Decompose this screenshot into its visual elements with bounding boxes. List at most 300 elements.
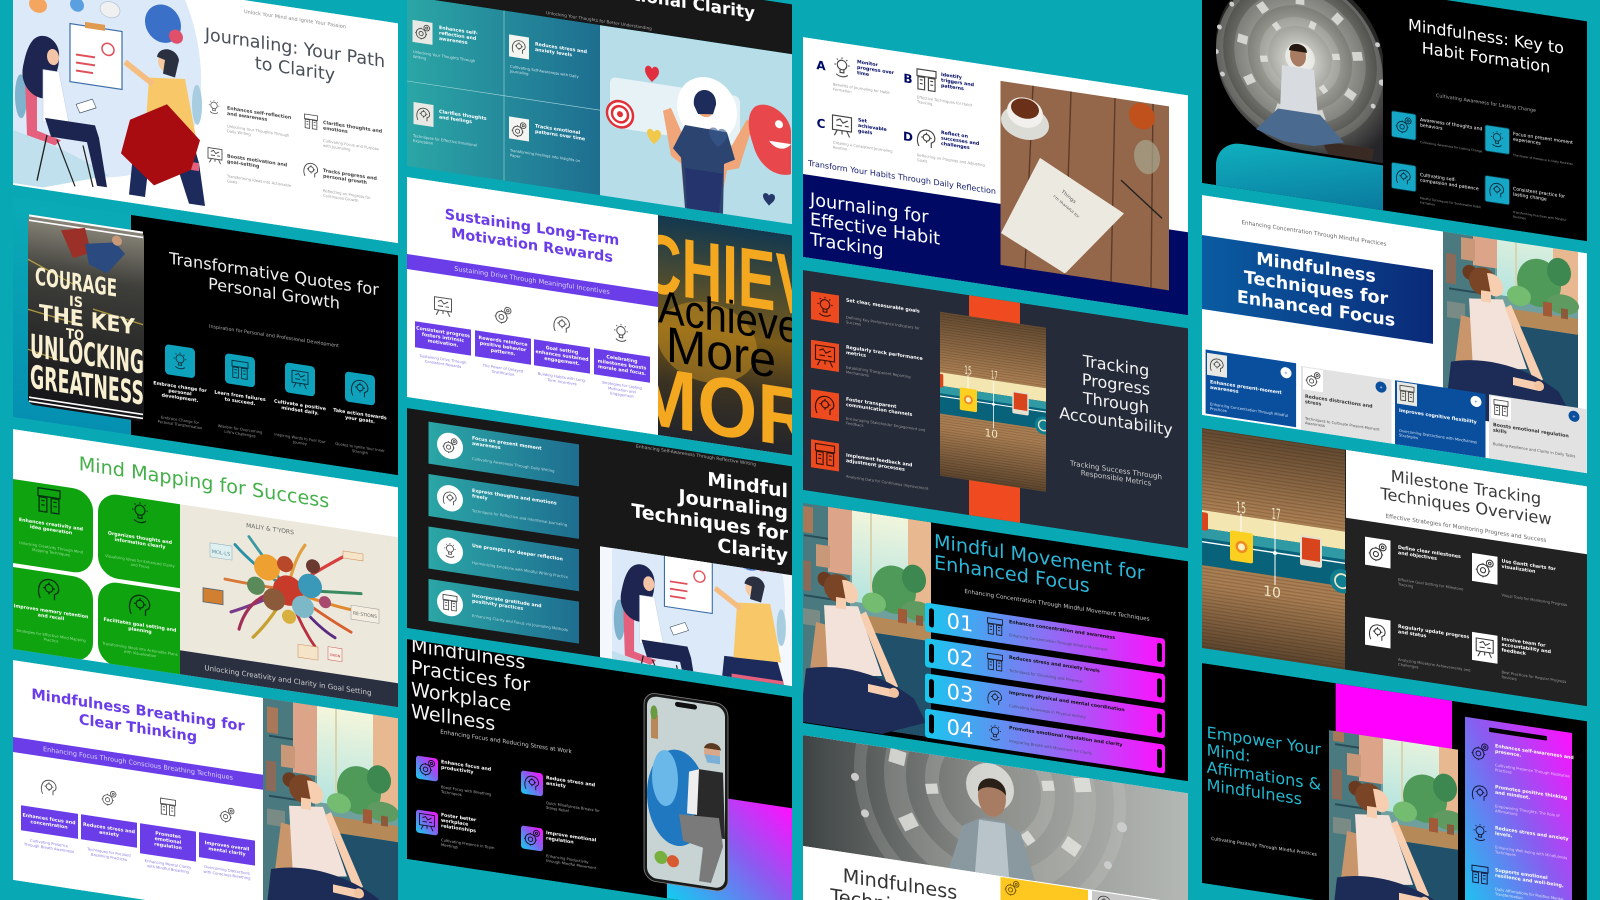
title: Enhanced Focus — [934, 551, 1090, 597]
red hexagon — [121, 104, 200, 186]
card 1: Enhances focus and — [23, 813, 75, 826]
panel: Empower Your Mind — [1202, 663, 1587, 900]
card 3: Goal setting — [546, 346, 578, 356]
item 3 — [1365, 617, 1471, 677]
item 3: compassion and patience — [1420, 177, 1479, 192]
item B: Identify — [941, 73, 962, 81]
gradient block — [667, 789, 792, 900]
book cover: courage quote: GREATNESS — [30, 358, 144, 413]
item: focus: Techniques — [440, 790, 462, 797]
bar 2: Techniques for Reflective and Intentional Journaling — [471, 509, 568, 527]
image: Achieve More poster: Achieve — [658, 280, 800, 353]
card: memory: Improves memory retention — [14, 604, 88, 620]
item: relationships: workplace — [441, 818, 468, 828]
timeline image: 10 — [1263, 583, 1281, 602]
card 2 — [1301, 366, 1392, 444]
cell 3: Clarifies thoughts — [439, 110, 487, 122]
item 4: Best Practices for Regular Progress — [1502, 670, 1566, 684]
item 1: presence. — [1495, 749, 1521, 759]
panel: Mindfulness Breathing for Clear Thinking — [13, 660, 399, 900]
card 1: Enhances present-moment — [1210, 380, 1282, 396]
item A — [816, 53, 895, 101]
quote item 4: your goals. — [345, 415, 375, 425]
step 01: Enhancing Concentration Through Mindful Movement — [1009, 633, 1108, 652]
item D: Reflecting on Progress and Adjusting — [917, 153, 985, 167]
subtitle: Sustaining Drive Through Meaningful Incentives — [454, 265, 610, 296]
card 3: Building Habits with Long- — [538, 372, 586, 383]
item C: achievable — [858, 123, 887, 133]
item 3: Formation — [1420, 200, 1435, 207]
timeline image: 17 — [1271, 505, 1280, 524]
title: Tracking — [1083, 351, 1149, 380]
panel: Sustaining Long-Term Motivation Rewards — [407, 177, 813, 467]
card 4 — [199, 803, 255, 881]
card: memory: and recall — [38, 612, 65, 622]
quote item 2: Life's Challenges — [224, 430, 256, 438]
mind map image: MALIY & T'YORS — [246, 522, 294, 536]
step 03: Improves physical and mental coordination — [1009, 690, 1125, 713]
title: to Clarity — [255, 54, 335, 86]
item 2: Empowering Thoughts: The Role of — [1495, 804, 1560, 818]
card: goal setting: with Visualization — [124, 650, 157, 659]
card 3: Improves cognitive flexibility — [1399, 408, 1478, 426]
card 2: anxiety — [99, 830, 120, 839]
title: Clarity — [717, 534, 789, 567]
card 4: Overcoming Distractions — [204, 865, 250, 876]
title: Practices for — [411, 656, 530, 697]
bar 4: Enhancing Clarity and Focus via Journaling Methods — [472, 614, 568, 632]
subtitle: Enhancing Concentration Through Mindful Practices — [1241, 220, 1387, 248]
quote item 3: Inspiring Words to Fuel Your — [274, 433, 326, 444]
bar 4: Incorporate gratitude and — [472, 594, 542, 609]
title: Techniques for — [631, 499, 789, 546]
title: Techniques for — [1244, 268, 1388, 310]
card 1: Sustaining Drive Through — [420, 354, 466, 365]
item B: Effective Techniques for Habit — [917, 95, 972, 108]
item D: D — [903, 129, 913, 145]
item 3 — [1392, 162, 1482, 214]
subtitle: Enhancing Concentration Through Mindful Movement Techniques — [964, 589, 1150, 623]
title: Journaling: Your Path — [205, 25, 385, 72]
cell 4: Paper — [510, 153, 521, 159]
item 3: Feedback — [846, 421, 864, 428]
card 2: The Power of Delayed — [483, 363, 523, 374]
bar 2: Express thoughts and emotions — [472, 489, 557, 507]
item 2: Promotes positive thinking — [1495, 785, 1567, 801]
step 02: 02 — [947, 643, 973, 672]
quote item 4: Strength — [352, 449, 369, 456]
card: organizes: Organizes thoughts and — [108, 531, 172, 546]
card 1: Enhancing Concentration Through Mindful — [1210, 402, 1288, 418]
illustration: consultation — [13, 0, 205, 212]
cell 3 — [412, 102, 487, 154]
title: Tracking — [809, 229, 884, 261]
subtitle: Unlocking Your Thoughts for Better Understanding — [546, 10, 652, 31]
item D: Reflect on — [941, 131, 968, 140]
subtitle: Enhancing Focus Through Conscious Breathing Techniques — [43, 745, 234, 782]
card 3: Enhancing Mental Clarity — [145, 859, 191, 870]
item 3: Regularly update progress — [1398, 625, 1469, 640]
item: progress: Continuous Growth — [323, 194, 359, 203]
item 3: communication channels — [846, 402, 912, 418]
item 1: Tracking — [1397, 582, 1414, 589]
photo: notebook on wood: Things — [1059, 188, 1077, 205]
quote item 2: Learn from failures — [214, 390, 266, 403]
card: creativity: idea generation — [30, 524, 73, 537]
item: clarifies thoughts: Clarifies thoughts and — [323, 121, 382, 135]
illustration: consultation — [600, 497, 792, 727]
item: relationships: Foster better — [441, 813, 476, 823]
bar 4 — [428, 579, 579, 644]
title: Enhanced Focus — [1237, 287, 1395, 331]
subtitle: Tracking Success Through — [1070, 458, 1162, 481]
item 1: Enhances self-awareness and — [1495, 744, 1574, 761]
subtitle: Enhancing Focus and Reducing Stress at Work — [440, 730, 572, 756]
quote item 1: Embrace Change for — [161, 415, 199, 425]
card 4: mental clarity — [208, 846, 246, 858]
card 1: fosters intrinsic — [422, 332, 464, 344]
card: goal setting: Facilitates goal setting and — [104, 618, 176, 634]
timeline image: 15 — [1236, 498, 1246, 518]
yellow card — [1000, 877, 1088, 900]
item 4: Reviews — [1501, 675, 1517, 681]
quote item 1: Embrace change for — [153, 381, 207, 394]
step 04: 04 — [947, 714, 973, 743]
card 1: Through Breath Awareness — [23, 842, 74, 854]
card 1: Consistent Rewards — [425, 360, 461, 369]
notch — [1489, 727, 1547, 741]
subtitle band — [407, 254, 658, 307]
quote item 2: Wisdom for Overcoming — [218, 424, 262, 435]
book cover: courage quote — [28, 214, 144, 422]
book cover: courage quote: TO — [66, 326, 84, 345]
quote item 3: Journey — [292, 440, 308, 446]
image: Achieve More poster: CHIEV — [641, 215, 813, 334]
photo: notebook on wood — [1000, 81, 1169, 290]
item: focus: Enhance focus and — [441, 760, 491, 773]
cell 3: and feelings — [439, 114, 472, 125]
item: progress: personal growth — [323, 173, 367, 186]
image: girl meditating — [1443, 232, 1579, 422]
panel: Mindful Movement for Enhanced Focus — [798, 497, 1188, 781]
bar 2 — [428, 474, 579, 539]
card 4: + — [1572, 414, 1576, 419]
card: goal setting — [98, 580, 180, 676]
title: Through — [1082, 388, 1149, 417]
orange stripe — [969, 295, 1020, 523]
photo: meditating man in mandala — [1214, 0, 1385, 164]
gradient panel — [1465, 717, 1572, 900]
subtitle: Unlock Your Mind and Ignite Your Passion — [244, 9, 346, 30]
subtitle: Enhancing Self-Awareness Through Reflective Writing — [636, 444, 756, 468]
card 4 — [594, 320, 650, 401]
step 01: Enhances concentration and awareness — [1009, 619, 1115, 641]
item: self-reflection: Daily Writing — [227, 129, 251, 137]
item 2 — [1472, 553, 1567, 607]
panel: Transformative Quotes for Personal Growth — [13, 197, 398, 475]
item: self-reflection — [208, 100, 291, 138]
item: stress: Quick Mindfulness Breaks for — [546, 801, 600, 813]
item 2: Affirmations — [1495, 809, 1517, 817]
illustration: man facing board with hearts — [600, 25, 792, 224]
title: Habit Formation — [1422, 38, 1550, 77]
item 2: Focus on present moment — [1513, 132, 1573, 146]
card 4: skills — [1493, 428, 1507, 436]
card 2 — [81, 787, 137, 864]
book cover: courage quote: THE KEY — [39, 300, 136, 341]
card 3: Strategies — [1399, 433, 1418, 440]
card 3: enhances sustained — [535, 349, 589, 363]
step 04: Integrating Breath with Movement for Clarity — [1009, 739, 1093, 756]
item: stress: Stress Relief — [546, 806, 570, 813]
item 4: resilience and well-being. — [1495, 873, 1564, 889]
item: progress — [304, 162, 377, 206]
card 4: milestones boosts — [598, 358, 646, 372]
item: clarifies thoughts: Cultivating Focus and Purpose — [323, 139, 379, 151]
card 1: Consistent progress — [416, 326, 470, 339]
item: relationships: relationships — [441, 823, 476, 834]
cell 1: Writing — [413, 55, 427, 61]
item C: C — [817, 116, 826, 131]
panel: Mindfulness Techniques — [803, 629, 1188, 900]
item 2 — [1472, 781, 1568, 824]
title: Motivation Rewards — [451, 226, 613, 266]
card 1 — [415, 294, 471, 370]
title: Mind: — [1207, 740, 1251, 766]
item 1: and objectives — [1398, 550, 1437, 562]
item: motivation: Boosts motivation and — [227, 154, 287, 168]
cell 1: awareness — [439, 36, 468, 46]
item 3 — [811, 389, 926, 437]
panel: Journaling: Your Path to Clarity — [13, 0, 398, 243]
panel: Mindfulness Practices for Workplace Wellness — [407, 633, 792, 900]
title: Empower Your — [1207, 723, 1321, 759]
image: girl meditating — [263, 698, 399, 900]
card: organizes: Visualizing Ideas for Enhanced Clarity — [105, 554, 175, 568]
panel: Tracking Progress Through Accountability — [803, 270, 1188, 548]
book cover: courage quote: IS — [69, 294, 83, 312]
item 4: Implement feedback and — [846, 454, 912, 469]
item 4: lasting change — [1513, 192, 1547, 203]
item 1: Awareness of thoughts and — [1420, 118, 1482, 132]
item B — [903, 66, 975, 113]
panel: Mindful Journaling Techniques for Clarity — [407, 408, 792, 727]
grey card — [1092, 891, 1188, 900]
quote item 1: personal — [168, 388, 192, 398]
subtitle band — [13, 737, 263, 790]
photo: notebook on wood: I'm thankful for — [1052, 194, 1081, 219]
title: Workplace — [411, 678, 511, 716]
book cover: courage quote: COURAGE — [35, 262, 117, 303]
title: Mindfulness — [1256, 249, 1376, 287]
item 2: Mechanisms — [846, 370, 869, 378]
bar 3 — [428, 526, 579, 591]
card 1: Practices — [1210, 407, 1227, 413]
card 4: with Conscious Breathing — [204, 870, 251, 881]
item: clarifies thoughts: with Journaling — [323, 144, 351, 152]
item C: Set — [858, 118, 867, 125]
cell 1 — [412, 20, 478, 63]
item: motivation — [208, 147, 291, 187]
quote item 4: Take action towards — [333, 408, 387, 422]
card: memory: Practice — [44, 637, 59, 644]
item: focus — [416, 755, 492, 802]
item: progress: Tracks progress and — [323, 169, 377, 182]
mind map image: ORGN — [330, 653, 341, 659]
title: Mindfulness — [1207, 775, 1302, 809]
card 3: emotional — [155, 836, 182, 846]
item: clarifies thoughts — [304, 114, 382, 152]
card 2 — [475, 302, 531, 380]
card: organizes: and Focus — [131, 563, 149, 569]
item D: successes and — [941, 135, 980, 147]
item 2: and mindset. — [1495, 790, 1530, 801]
title: Clear Thinking — [79, 711, 197, 746]
item: stress: Reduce stress and — [546, 776, 595, 788]
cell 2: Cultivating Self-Awareness with Daily — [510, 65, 579, 79]
card 3: with Mindful Breathing — [147, 864, 190, 874]
phone mockup — [644, 692, 728, 893]
item: self-reflection: and awareness — [227, 111, 267, 123]
item A: Benefits of Journaling for Habit — [833, 83, 890, 95]
item 2: The Power of Presence in Daily Routines — [1512, 153, 1573, 166]
card 1 — [1206, 350, 1296, 427]
item D — [903, 124, 985, 172]
card 3: Overcoming Distractions with Mindfulness — [1399, 429, 1477, 445]
quote item 4: Quotes to Ignite Your Inner — [335, 442, 385, 453]
card 3: Promotes — [155, 832, 181, 840]
card 4: morale and focus. — [598, 364, 646, 377]
item: relationships: Meetings — [441, 843, 458, 849]
title: Affirmations & — [1207, 758, 1322, 794]
cell 1: Unlocking Your Thoughts Through — [413, 50, 475, 63]
item 2: experiences — [1513, 137, 1541, 147]
item: regulation: regulation — [546, 836, 574, 846]
card: goal setting: planning — [128, 626, 152, 636]
card: creativity: Mapping Techniques — [32, 548, 70, 557]
item C: Creating a Consistent Journaling — [833, 141, 893, 154]
timeline image: 15 — [964, 364, 972, 378]
bar 2: freely — [472, 493, 488, 502]
quote item 1: development. — [162, 392, 199, 404]
panel: Emotional Clarity — [407, 0, 792, 224]
item: motivation: Transforming Ideas into Actionable — [227, 174, 291, 188]
item 1: Effective Goal Setting for Milestone — [1398, 578, 1463, 592]
item C: goals — [858, 128, 872, 136]
card 3 — [140, 795, 196, 875]
item A: A — [816, 58, 826, 74]
title: Personal Growth — [208, 274, 340, 313]
card: organizes — [98, 492, 180, 588]
item 1: Defining Key Performance Indicators for — [846, 316, 920, 331]
item 4: accountability and — [1501, 642, 1552, 655]
card 2: Awareness — [1305, 421, 1325, 428]
item: focus: Boost Focus with Breathing — [441, 785, 491, 797]
item 1 — [1392, 111, 1483, 153]
item 4: Routines — [1513, 215, 1526, 221]
quote item 3: mindset daily. — [281, 405, 319, 417]
title: Techniques Overview — [1379, 484, 1552, 529]
item: stress — [521, 770, 600, 818]
item: focus: productivity — [441, 765, 474, 776]
step 02 — [925, 638, 1165, 703]
panel: Mind Mapping for Success — [13, 429, 398, 709]
cell 2: Journaling — [509, 69, 529, 76]
title: Accountability — [1059, 403, 1173, 439]
item 1: Cultivating Presence Through Meditation — [1495, 763, 1570, 779]
timeline image: 17 — [991, 368, 998, 382]
bar 3: Harmonizing Emotions with Mindful Writing Practice — [472, 561, 569, 579]
image: Achieve More poster: MOR — [633, 347, 813, 467]
card 2: + — [1379, 384, 1383, 390]
timeline image — [940, 312, 1046, 492]
card 4: Strategies for Lasting — [602, 381, 642, 391]
card: creativity: Enhances creativity and — [19, 518, 83, 533]
item A: time — [857, 70, 869, 78]
image: girl meditating — [1329, 730, 1458, 900]
item 4: feedback — [1501, 647, 1527, 657]
card 4: Celebrating — [606, 355, 638, 365]
title: Sustaining Long-Term — [445, 207, 619, 249]
item 1: Define clear milestones — [1398, 546, 1461, 560]
card 2: positive behavior — [480, 341, 527, 354]
card 2: Reduces distractions and — [1305, 395, 1373, 410]
cell 4: patterns over time — [535, 129, 585, 142]
card 1: + — [1284, 370, 1288, 375]
item D: challenges — [941, 141, 970, 151]
caption: Transform Your Habits Through Daily Reflection — [807, 159, 996, 196]
title: Effective Habit — [810, 209, 940, 250]
card 3: regulation — [154, 841, 182, 852]
bar 3: Use prompts for deeper reflection — [472, 543, 564, 563]
item B: Tracking — [916, 100, 933, 106]
image: girl meditating — [803, 503, 931, 737]
card 1: concentration — [30, 819, 68, 831]
card 2: patterns. — [491, 348, 516, 357]
item B: B — [903, 71, 913, 87]
item: regulation: Improve emotional — [546, 831, 596, 844]
item 3: Reduces stress and anxiety — [1495, 826, 1568, 842]
item: progress: Reflecting on Progress for — [323, 189, 370, 200]
title area — [1346, 450, 1587, 554]
item: regulation: Enhancing Productivity — [546, 854, 588, 864]
item A: progress over — [857, 65, 895, 76]
card 4: Building Resilience and Clarity in Daily Tasks — [1493, 442, 1575, 458]
item 4: adjustment processes — [846, 458, 905, 473]
title: Mindful Movement for — [934, 530, 1145, 585]
item 1: Cultivating Awareness for Lasting Change — [1420, 140, 1482, 153]
image: Achieve More poster — [633, 211, 813, 467]
card 1: awareness — [1210, 385, 1239, 395]
title: Mind Mapping for Success — [79, 452, 329, 513]
quote item 1 — [153, 342, 207, 431]
cell 4: Transforming Feelings into Insights on — [510, 149, 580, 163]
card 1 — [21, 776, 78, 855]
card 2: Breathing Practices — [91, 853, 127, 862]
cell 2 — [509, 34, 588, 85]
item: relationships — [416, 808, 495, 855]
item 4: Analyzing Data for Continuous Improvement — [846, 475, 929, 491]
card 4: Engagement — [610, 391, 634, 399]
subtitle: Cultivating Positivity Through Mindful Practices — [1211, 836, 1317, 858]
quote item 1: Personal Transformation — [158, 420, 203, 431]
panel: Mindfulness Techniques for Enhanced Focus — [1202, 154, 1587, 473]
subtitle: Inspiration for Personal and Professional Development — [209, 324, 339, 349]
quote item 4 — [333, 369, 387, 458]
title band — [1202, 235, 1433, 344]
item 3: Encouraging Stakeholder Engagement and — [846, 417, 925, 433]
quote item 3 — [274, 360, 326, 449]
